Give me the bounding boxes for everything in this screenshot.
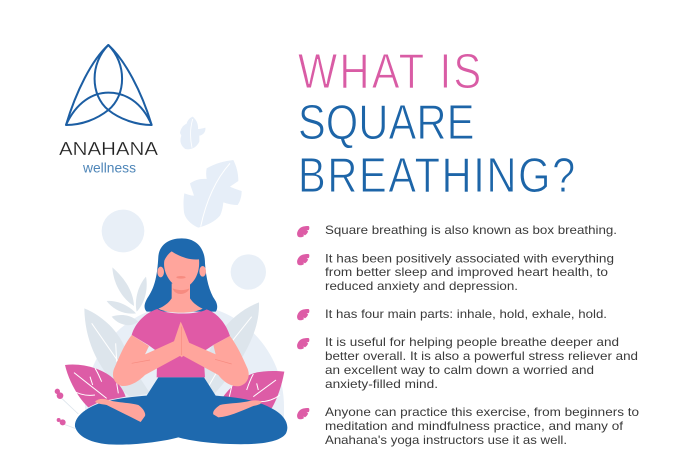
grey background leaves xyxy=(84,267,259,397)
bullet 5 xyxy=(297,405,639,447)
bullet 2 xyxy=(297,251,614,293)
bullet 4: an excellent way to calm down a worried and xyxy=(325,363,594,377)
bullet 5: meditation and mindfulness practice, and many of xyxy=(325,419,624,433)
bullet 2: reduced anxiety and depression. xyxy=(325,279,518,293)
bullet 2: from better sleep and improved heart health, to xyxy=(325,265,608,279)
bullet list xyxy=(297,223,639,447)
praying hands xyxy=(172,322,191,357)
pink leaf right veins xyxy=(229,374,280,402)
arms xyxy=(113,335,182,386)
bullet 4: anxiety-filled mind. xyxy=(325,377,438,391)
logo mark: trinity triangle xyxy=(66,45,152,125)
icon: small pale leaf xyxy=(180,117,205,149)
logo wordmark: ANAHANA xyxy=(59,138,159,159)
title xyxy=(298,44,575,203)
logo xyxy=(59,45,159,176)
berry sprigs xyxy=(55,389,78,428)
title line 1: WHAT IS xyxy=(298,44,481,99)
top xyxy=(132,309,230,377)
pink leaf left xyxy=(65,364,126,407)
bullet 4 xyxy=(297,335,638,391)
bullet 4: better overall. It is also a powerful stress reliever and xyxy=(325,349,638,363)
mouth xyxy=(176,276,186,279)
title line 3: BREATHING? xyxy=(298,148,575,203)
logo subtitle: wellness xyxy=(82,160,136,176)
title line 2: SQUARE xyxy=(298,95,474,150)
neck shadow xyxy=(173,288,189,294)
bullet 5: Anahana's yoga instructors use it as well. xyxy=(325,433,567,447)
legs xyxy=(75,377,287,445)
hair xyxy=(145,238,217,312)
bullet 4: It is useful for helping people breathe deeper and xyxy=(325,335,619,349)
face xyxy=(164,251,199,289)
icon: large pale leaf xyxy=(184,160,242,228)
ears xyxy=(157,267,164,277)
bullet 3: It has four main parts: inhale, hold, exhale, hold. xyxy=(325,307,607,321)
bullet 5: Anyone can practice this exercise, from beginners to xyxy=(325,405,639,419)
feet xyxy=(95,399,145,422)
pink leaf left veins xyxy=(72,368,118,398)
background circles xyxy=(85,210,284,420)
leaf veins xyxy=(92,317,252,387)
bullet 2: It has been positively associated with everything xyxy=(325,251,614,265)
illustration: meditating woman xyxy=(55,210,287,445)
neck and chest xyxy=(158,283,203,313)
bullet 1: Square breathing is also known as box breathing. xyxy=(325,223,617,237)
pink leaf right xyxy=(223,371,284,408)
